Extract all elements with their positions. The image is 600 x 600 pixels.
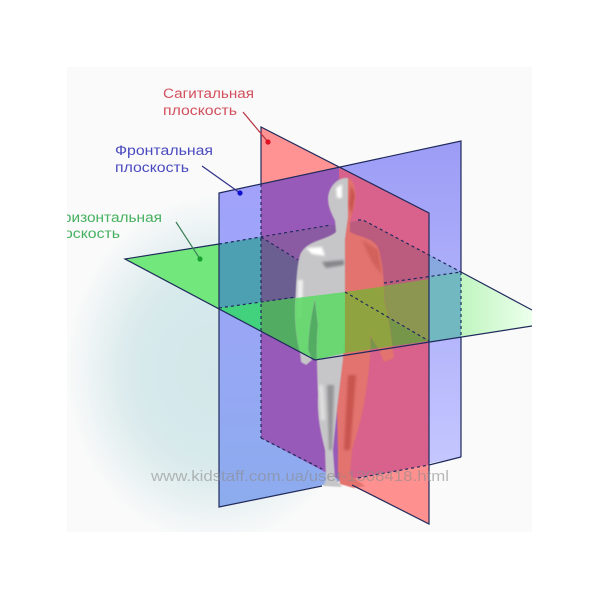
human figure [295, 178, 394, 488]
green plane over figure [295, 286, 392, 359]
label: horizontal plane: плоскость [46, 226, 120, 241]
pointer: sagittal plane [243, 112, 271, 145]
figure shading [297, 184, 382, 450]
frontal plane (blue) [219, 141, 461, 507]
label: sagittal plane: плоскость [163, 103, 237, 118]
label: frontal plane: Фронтальная [115, 143, 213, 158]
label: sagittal plane [163, 86, 254, 118]
label: frontal plane [115, 143, 213, 175]
pointer: frontal plane [202, 166, 243, 196]
panel: background [67, 67, 532, 532]
sagittal plane (red) [261, 127, 429, 524]
plane outlines [125, 127, 532, 524]
watermark: www.kidstaff.com.ua/user-1308418.html [150, 469, 449, 485]
label: horizontal plane [67, 214, 161, 238]
horizontal plane (green) [125, 220, 532, 360]
label: horizontal plane: Горизонтальная [47, 210, 162, 225]
label: frontal plane: плоскость [115, 160, 189, 175]
label: sagittal plane: Сагитальная [163, 86, 254, 101]
pointer: horizontal plane [176, 222, 203, 262]
